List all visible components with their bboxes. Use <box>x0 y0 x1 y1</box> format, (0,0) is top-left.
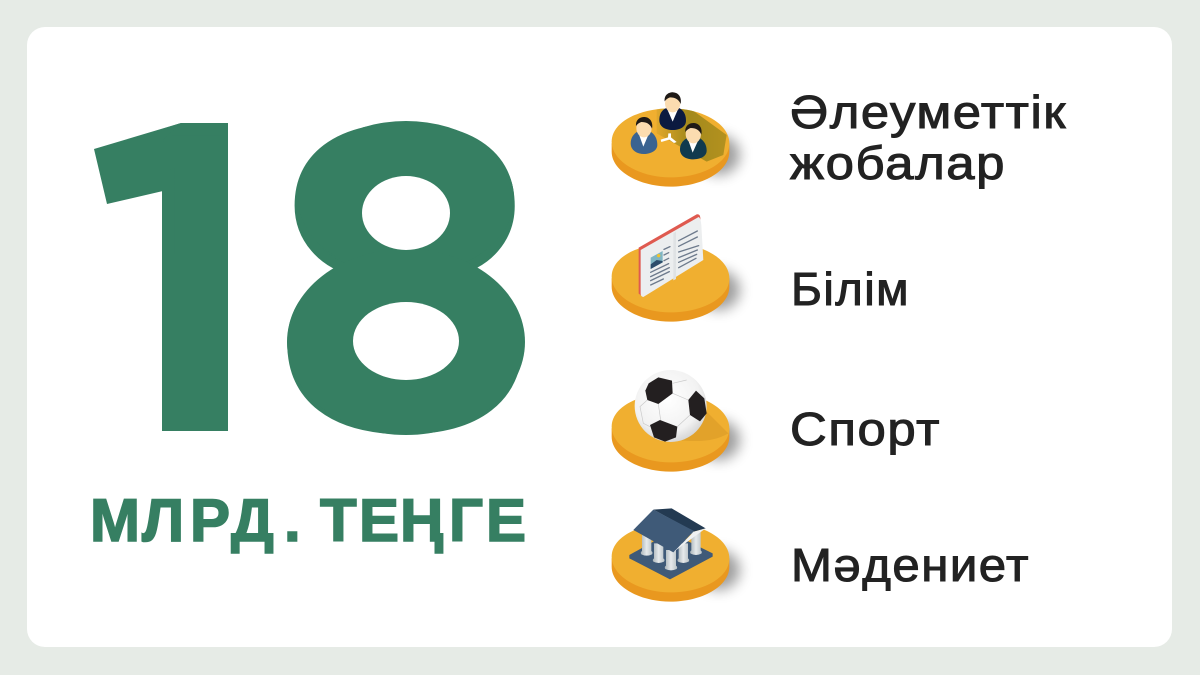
big number 18: 8 <box>278 41 531 516</box>
icon: social projects <box>612 92 740 187</box>
big number 18: 1 <box>65 34 310 525</box>
label: social projects: Әлеуметтік <box>790 86 1067 138</box>
unit label: МЛРД. ТЕҢГЕ <box>90 487 526 554</box>
label: culture: Мәдениет <box>791 539 1030 591</box>
icon: open book <box>612 214 740 322</box>
label: social projects: жобалар <box>790 137 1006 189</box>
icon: football <box>612 370 740 472</box>
icon: museum <box>612 508 740 602</box>
label: sport: Спорт <box>790 403 941 455</box>
big number 18 <box>65 34 531 525</box>
label: education: Білім <box>791 263 910 315</box>
label: social projects <box>790 86 1067 189</box>
